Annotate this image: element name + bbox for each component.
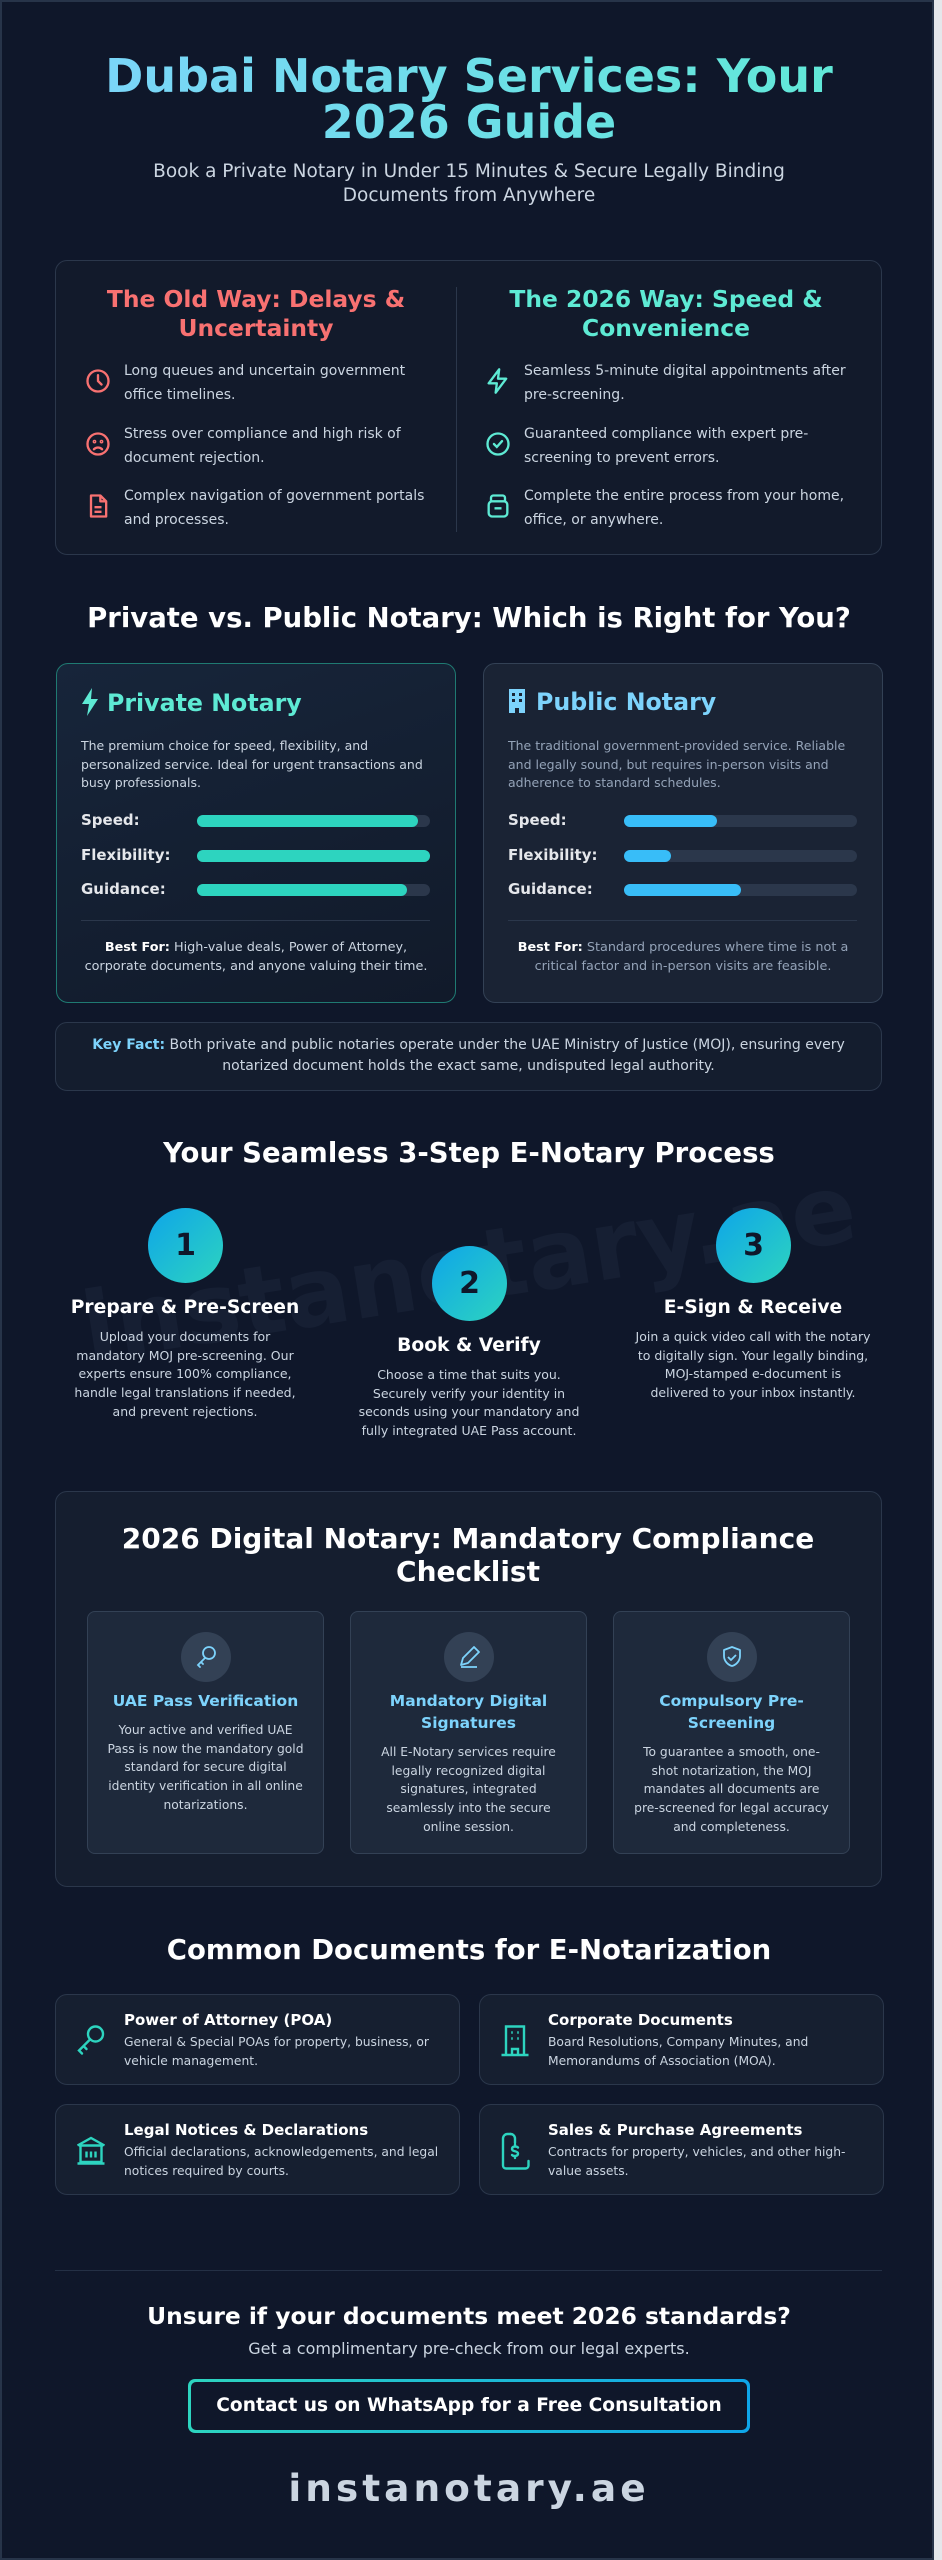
CTA heading: Unsure if your documents meet 2026 standards? <box>147 2302 791 2330</box>
icon: pen <box>444 1632 494 1682</box>
doc card: corporate: Corporate Documents <box>548 2011 733 2029</box>
item: long queues: Long queues and uncertain government office timelines. <box>124 363 405 403</box>
icon: clock <box>86 369 110 393</box>
icon: courthouse <box>77 2136 105 2165</box>
circle 2: 2 <box>459 1266 480 1301</box>
heading: 2026 way: The 2026 Way: Speed & <box>509 285 823 313</box>
check card: pre-screening: shot notarization, the MOJ <box>652 1764 811 1778</box>
panel: private notary <box>56 663 456 1003</box>
check card: pre-screening <box>613 1611 850 1854</box>
heading: private vs public: Private vs. Public Notary: Which is Right for You? <box>87 602 851 634</box>
panel: compliance checklist <box>55 1491 882 1887</box>
icon: key <box>77 2025 104 2055</box>
check card: digital signatures: All E-Notary services require legally recognized digital signatures, integrated seamlessly into the secure online session. <box>381 1745 556 1834</box>
step 3 <box>634 1208 870 1400</box>
circle 1: 1 <box>175 1228 196 1263</box>
icon: box <box>488 494 508 518</box>
step 1 <box>71 1208 299 1419</box>
item: seamless: Seamless 5-minute digital appointments after pre-screening. <box>524 363 846 403</box>
doc card: corporate: Board Resolutions, Company Minutes, and Memorandums of Association (MOA). <box>548 2035 808 2068</box>
description: The traditional government-provided service. Reliable and legally sound, but requires in-person visits and adherence to standard schedules. <box>508 738 845 790</box>
doc card: legal notices <box>55 2104 460 2195</box>
icon: bolt <box>487 368 508 394</box>
description: The premium choice for speed, flexibility, and personalized service. Ideal for urgent transactions and busy professionals. <box>81 738 423 790</box>
check card: pre-screening: pre-screened for legal accuracy <box>634 1801 829 1815</box>
check card: UAE pass: UAE Pass Verification <box>113 1692 298 1710</box>
doc card: POA: General & Special POAs for property, business, or vehicle management. <box>124 2035 429 2068</box>
heading: old way: The Old Way: Delays & <box>107 285 405 313</box>
footer brand: instanotary.ae <box>288 2466 650 2510</box>
CTA button: Contact us on WhatsApp for a Free Consultation <box>216 2395 722 2416</box>
step 2 <box>359 1246 579 1438</box>
heading: 2026 way: Convenience <box>582 314 750 342</box>
title <box>22 53 916 145</box>
icon: document <box>90 494 108 518</box>
icon: key <box>181 1632 231 1682</box>
bars: private <box>81 811 430 921</box>
check card: digital signatures: Mandatory Digital <box>390 1692 547 1710</box>
item: complete anywhere: Complete the entire process from your home, office, or anywhere. <box>524 488 844 528</box>
card title: Private Notary <box>107 689 302 717</box>
watermark: instanotary.ae <box>74 1152 864 1384</box>
check card: pre-screening: To guarantee a smooth, one- <box>643 1745 820 1759</box>
check card: pre-screening: mandates all documents are <box>644 1782 819 1796</box>
best for: private: Best For: High-value deals, Power of Attorney, corporate documents, and anyone valuing their time. <box>85 940 427 974</box>
CTA button <box>188 2379 750 2433</box>
check card: pre-screening: Screening <box>688 1714 775 1732</box>
best for: public: Best For: Standard procedures where time is not a critical factor and in-person visits are feasible. <box>518 940 848 974</box>
heading: 2026 way <box>509 285 823 342</box>
doc card: POA <box>55 1994 460 2085</box>
check card: UAE pass: Your active and verified UAE Pass is now the mandatory gold standard for secure digital identity verification in all online notarizations. <box>107 1723 304 1812</box>
check card: UAE pass <box>87 1611 324 1854</box>
text: Guidance: <box>81 880 166 898</box>
panel: old way vs 2026 way <box>55 260 882 555</box>
doc card: legal notices: Legal Notices & Declarations <box>124 2121 368 2139</box>
doc card: POA: Power of Attorney (POA) <box>124 2011 332 2029</box>
doc card: sales: Sales & Purchase Agreements <box>548 2121 802 2139</box>
heading: old way: Uncertainty <box>178 314 333 342</box>
heading <box>122 1522 814 1588</box>
icon: shield <box>707 1632 757 1682</box>
callout: key fact <box>55 1022 882 1091</box>
step 1: Upload your documents for mandatory MOJ pre-screening. Our experts ensure 100% compliance, handle legal translations if needed, and prevent rejections. <box>74 1329 296 1419</box>
text: Speed: <box>81 811 140 829</box>
text: Flexibility: <box>81 846 170 864</box>
step 3: Join a quick video call with the notary to digitally sign. Your legally binding, MOJ-stamped e-document is <box>636 1329 870 1381</box>
heading: common documents: Common Documents for E-Notarization <box>167 1934 771 1966</box>
heading: 2026 Digital Notary: Mandatory Compliance <box>122 1522 814 1555</box>
subtitle: Book a Private Notary in Under 15 Minutes & Secure Legally Binding Documents from Anywhere <box>153 161 785 206</box>
item: stress: Stress over compliance and high risk of document rejection. <box>124 426 401 466</box>
CTA subtext: Get a complimentary pre-check from our legal experts. <box>248 2339 690 2358</box>
panel: public notary <box>483 663 883 1003</box>
callout: key fact: Key Fact: Both private and public notaries operate under the UAE Ministry of Justice (MOJ), ensuring every notarized document holds the exact same, undisputed legal authority. <box>92 1037 845 1074</box>
circle 2 <box>432 1246 507 1321</box>
icon: sad face <box>86 432 110 456</box>
text: Flexibility: <box>508 846 598 864</box>
text: Speed: <box>508 811 567 829</box>
title: 2026 Guide <box>322 95 616 149</box>
step 2: Choose a time that suits you. Securely verify your identity in seconds using your mandatory and fully integrated UAE Pass account. <box>359 1367 579 1438</box>
step 1: Prepare & Pre-Screen <box>71 1297 299 1318</box>
icon: contract <box>502 2132 530 2170</box>
icon: building <box>502 2025 528 2056</box>
circle 3: 3 <box>743 1228 764 1263</box>
step 3: delivered to your inbox instantly. <box>650 1385 856 1400</box>
check card: digital signatures <box>350 1611 587 1854</box>
title: Dubai Notary Services: Your <box>105 49 833 103</box>
text: Guidance: <box>508 880 593 898</box>
icon: check circle <box>486 432 510 456</box>
circle 3 <box>716 1208 791 1283</box>
circle 1 <box>148 1208 223 1283</box>
doc card: corporate <box>479 1994 884 2085</box>
heading: old way <box>107 285 405 342</box>
check card: digital signatures: Signatures <box>421 1714 516 1732</box>
step 2: Book & Verify <box>397 1335 541 1356</box>
doc card: legal notices: Official declarations, acknowledgements, and legal notices required by courts. <box>124 2145 438 2178</box>
doc card: sales: Contracts for property, vehicles, and other high-value assets. <box>548 2145 845 2178</box>
check card: pre-screening: Compulsory Pre- <box>659 1692 804 1710</box>
item: guaranteed: Guaranteed compliance with expert pre-screening to prevent errors. <box>524 426 808 466</box>
heading: Checklist <box>396 1555 540 1588</box>
card title: Public Notary <box>536 688 716 716</box>
heading: 3-step process: Your Seamless 3-Step E-Notary Process <box>163 1137 775 1169</box>
check card: pre-screening: and completeness. <box>673 1820 790 1834</box>
item: complex navigation: Complex navigation of government portals and processes. <box>124 488 424 528</box>
bars: public <box>508 811 857 921</box>
step 3: E-Sign & Receive <box>664 1297 842 1318</box>
doc card: sales <box>479 2104 884 2195</box>
